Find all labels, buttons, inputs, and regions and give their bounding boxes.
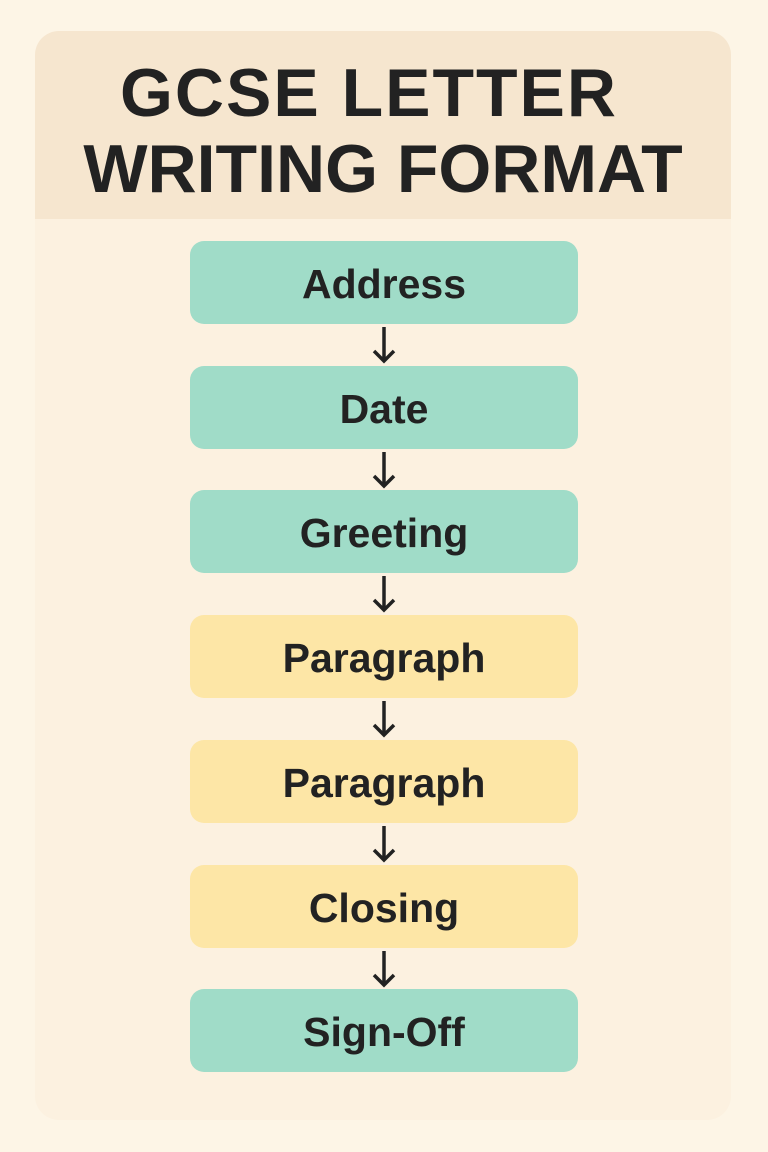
arrow 6 <box>372 951 396 988</box>
step: Greeting <box>190 490 578 573</box>
step: Sign-Off <box>190 989 578 1072</box>
step: Paragraph 1: Paragraph <box>283 634 485 680</box>
step: Address <box>190 241 578 324</box>
step: Address: Address <box>302 260 466 306</box>
arrow 3 <box>372 576 396 612</box>
step: Paragraph 2: Paragraph <box>283 760 485 806</box>
step: Paragraph 1 <box>190 615 578 698</box>
arrow 2 <box>372 452 396 488</box>
step: Closing <box>190 865 578 948</box>
arrow 5 <box>372 826 396 862</box>
title header <box>35 31 731 219</box>
step: Date: Date <box>340 386 428 432</box>
step: Greeting: Greeting <box>300 510 468 556</box>
step: Sign-Off: Sign-Off <box>303 1008 465 1054</box>
arrow 1 <box>372 327 396 364</box>
step: Date <box>190 366 578 449</box>
arrow 4 <box>372 701 396 738</box>
title line 1: GCSE LETTER <box>120 55 618 131</box>
title line 2: WRITING FORMAT <box>83 131 683 207</box>
step: Paragraph 2 <box>190 740 578 823</box>
step: Closing: Closing <box>309 884 459 930</box>
